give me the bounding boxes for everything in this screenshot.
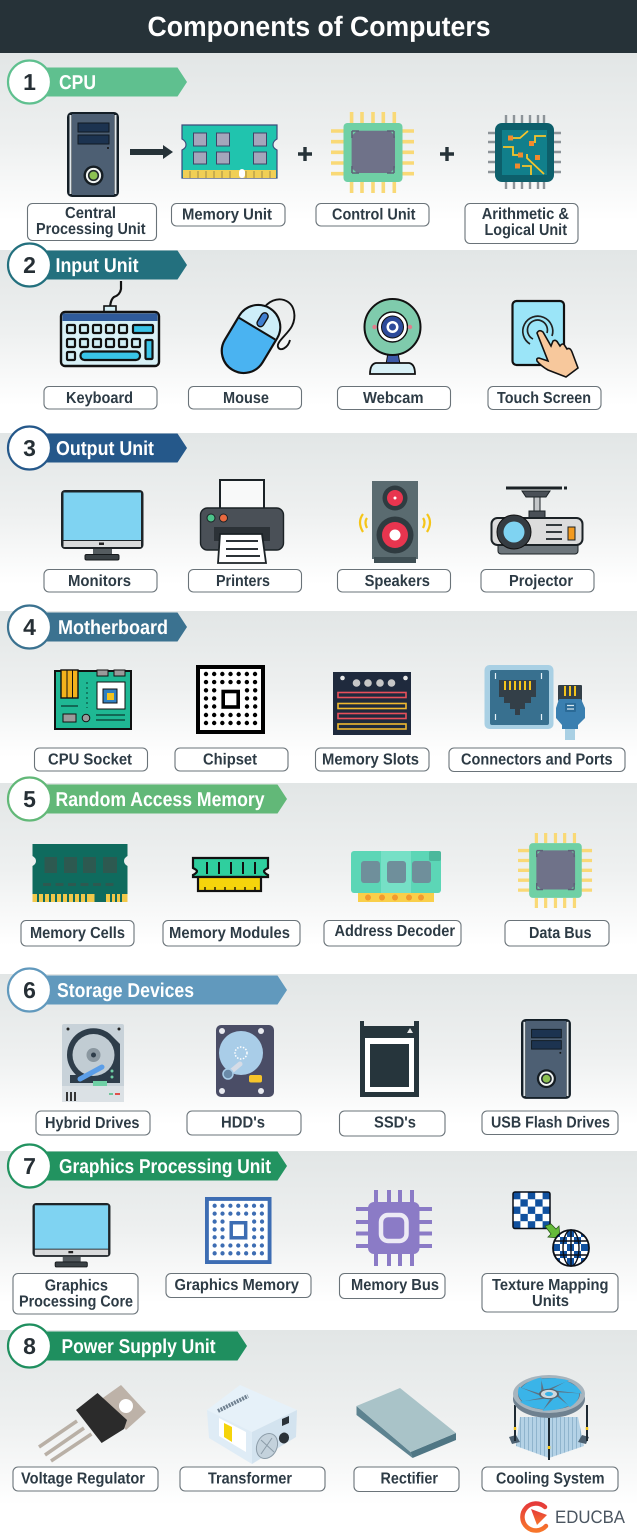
icon: arithmetic logic chip — [488, 115, 561, 189]
label: Texture Mapping Units: Texture Mapping — [492, 1277, 608, 1294]
panel background — [0, 611, 637, 783]
panel: Random Access Memory — [0, 778, 637, 974]
icon: address decoder — [351, 851, 441, 902]
label: Connectors and Ports — [449, 748, 625, 772]
section badge 1: CPU — [59, 72, 96, 94]
icon: data bus chip — [518, 833, 592, 908]
icon: transformer power supply — [207, 1385, 297, 1464]
label: Memory Modules: Memory Modules — [169, 925, 290, 942]
label: Graphics Processing Core — [13, 1274, 138, 1314]
label: Memory Cells — [21, 920, 134, 946]
label: Memory Cells: Memory Cells — [30, 925, 125, 942]
label: Keyboard — [44, 386, 157, 409]
section badge 2 — [8, 244, 187, 286]
label: Voltage Regulator — [13, 1467, 158, 1491]
icon: webcam — [364, 299, 420, 374]
icon: memory unit — [182, 125, 277, 178]
section badge 1: 1 — [23, 69, 36, 95]
label: Projector — [481, 570, 594, 592]
logo: EDUCBA — [522, 1504, 625, 1531]
label: Voltage Regulator: Voltage Regulator — [21, 1470, 145, 1488]
label: Touch Screen — [488, 386, 601, 410]
panel: Storage Devices — [0, 968, 637, 1151]
label: Memory Unit: Memory Unit — [182, 206, 273, 224]
label: Cooling System — [482, 1467, 618, 1491]
section badge 2: Input Unit — [56, 255, 139, 277]
panel: Power Supply Unit — [0, 1324, 637, 1536]
label: SSD's: SSD's — [374, 1114, 416, 1132]
panel background — [0, 53, 637, 250]
label: Chipset: Chipset — [203, 752, 258, 768]
panel background — [0, 250, 637, 433]
panel background — [0, 783, 637, 974]
section badge 6: Storage Devices — [57, 980, 194, 1002]
panel background — [0, 1330, 637, 1536]
label: Keyboard: Keyboard — [66, 390, 133, 407]
panel background — [0, 433, 637, 611]
label: Memory Bus — [340, 1274, 445, 1298]
label: Projector: Projector — [509, 573, 573, 590]
label: USB Flash Drives — [482, 1111, 618, 1134]
label: Speakers: Speakers — [365, 573, 430, 590]
label: Touch Screen: Touch Screen — [497, 390, 591, 407]
label: Webcam: Webcam — [363, 390, 424, 407]
panel background — [0, 974, 637, 1151]
label: Control Unit — [316, 204, 429, 226]
label: Graphics Memory — [166, 1274, 311, 1298]
section badge 4: 4 — [23, 614, 36, 640]
icon: computer tower — [67, 112, 119, 197]
label: Address Decoder — [324, 920, 461, 946]
icon: memory modules — [193, 858, 268, 891]
label: Memory Unit — [172, 204, 285, 226]
icon: keyboard — [61, 281, 159, 366]
section badge 8 — [8, 1324, 247, 1368]
label: Transformer — [180, 1467, 325, 1491]
icon: monitor — [61, 490, 144, 560]
plus sign — [298, 147, 312, 161]
label: CPU Socket — [34, 748, 148, 771]
icon: graphics memory — [207, 1199, 270, 1262]
icon: mouse — [214, 297, 294, 381]
label: Monitors — [44, 570, 157, 592]
panel: Input Unit — [0, 244, 637, 433]
section badge 3: 3 — [23, 435, 36, 461]
section badge 6 — [8, 968, 287, 1012]
icon: control unit chip — [331, 112, 414, 193]
section badge 3 — [8, 426, 187, 470]
icon: printer — [200, 480, 284, 563]
label: Control Unit: Control Unit — [332, 206, 416, 224]
label: Chipset — [175, 748, 288, 771]
label: Memory Modules — [163, 920, 300, 946]
label: Arithmetic and Logical Unit: Logical Unit — [484, 222, 568, 239]
label: Rectifier — [354, 1467, 459, 1492]
panel: Graphics Processing Unit — [0, 1144, 637, 1330]
section badge 5 — [8, 778, 287, 820]
panel: Output Unit — [0, 426, 637, 611]
icon: speaker — [360, 481, 430, 563]
panel: CPU — [0, 53, 637, 250]
label: CPU Socket: CPU Socket — [48, 752, 133, 768]
label: Graphics Processing Core: Graphics — [45, 1278, 108, 1294]
label: Webcam — [338, 386, 450, 410]
section badge 7: Graphics Processing Unit — [59, 1156, 271, 1178]
label: Speakers — [338, 570, 450, 592]
label: Connectors and Ports: Connectors and Ports — [461, 752, 613, 768]
label: Transformer: Transformer — [208, 1470, 292, 1488]
label: Graphics Processing Core: Processing Core — [19, 1294, 133, 1310]
label: Memory Slots — [316, 748, 429, 771]
section badge 4: Motherboard — [58, 617, 168, 639]
label: Data Bus: Data Bus — [529, 925, 592, 942]
label: Memory Bus: Memory Bus — [351, 1277, 439, 1294]
section badge 6: 6 — [23, 977, 36, 1003]
icon: memory cells — [32, 844, 128, 902]
label: Central Processing Unit: Central — [65, 205, 116, 222]
section badge 3: Output Unit — [56, 438, 154, 460]
section badge 4 — [8, 606, 187, 648]
panel background — [0, 1151, 637, 1330]
label: Arithmetic and Logical Unit: Arithmetic & — [482, 206, 569, 223]
label: USB Flash Drives: USB Flash Drives — [491, 1114, 610, 1132]
section badge 5: Random Access Memory — [56, 789, 265, 811]
icon: memory bus chip — [356, 1190, 432, 1266]
label: Arithmetic and Logical Unit — [465, 204, 578, 244]
label: Cooling System: Cooling System — [496, 1470, 604, 1488]
label: HDD's: HDD's — [221, 1114, 265, 1132]
icon: connectors and ports — [484, 665, 585, 740]
panel: Motherboard — [0, 606, 637, 783]
section badge 8: Power Supply Unit — [62, 1336, 216, 1358]
icon: USB flash drive tower — [521, 1019, 571, 1099]
label: Texture Mapping Units: Units — [532, 1293, 569, 1310]
section badge 2: 2 — [23, 252, 36, 278]
icon: touch screen — [512, 301, 578, 377]
label: Monitors: Monitors — [68, 573, 131, 590]
label: Texture Mapping Units — [482, 1274, 618, 1312]
label: Mouse — [188, 386, 302, 409]
label: SSD's — [340, 1111, 445, 1136]
label: Mouse: Mouse — [223, 390, 269, 407]
section badge 5: 5 — [23, 786, 36, 812]
label: Address Decoder: Address Decoder — [334, 923, 455, 940]
label: Memory Slots: Memory Slots — [322, 752, 419, 768]
label: Hybrid Drives — [36, 1111, 150, 1135]
label: Hybrid Drives: Hybrid Drives — [45, 1115, 140, 1132]
section badge 8: 8 — [23, 1333, 36, 1359]
label: Rectifier: Rectifier — [380, 1470, 438, 1488]
icon: hard disk drive — [216, 1025, 274, 1097]
title: Components of Computers — [148, 11, 490, 42]
label: Graphics Memory: Graphics Memory — [174, 1277, 299, 1294]
label: HDD's — [187, 1111, 301, 1135]
label: Data Bus — [505, 920, 609, 946]
icon: graphics processing core monitor — [32, 1203, 110, 1267]
icon: voltage regulator — [39, 1385, 146, 1461]
icon: solid state drive — [360, 1021, 419, 1097]
section badge 7 — [8, 1144, 287, 1188]
icon: memory slots — [333, 672, 411, 735]
icon: cooling system — [509, 1375, 589, 1460]
icon: rectifier — [356, 1388, 456, 1458]
section badge 7: 7 — [23, 1153, 36, 1179]
arrow — [130, 145, 173, 159]
icon: chipset — [198, 667, 263, 732]
section badge 1 — [8, 60, 187, 104]
label: Central Processing Unit — [28, 204, 156, 240]
icon: texture mapping — [513, 1192, 589, 1266]
label: Central Processing Unit: Processing Unit — [36, 221, 146, 238]
label: Printers — [188, 570, 302, 592]
icon: CPU socket motherboard — [55, 670, 131, 729]
header bar — [0, 0, 637, 53]
icon: projector — [492, 486, 582, 554]
logo: EDUCBA: EDUCBA — [555, 1507, 625, 1527]
icon: hybrid drive — [62, 1024, 124, 1102]
plus sign — [440, 147, 454, 161]
label: Printers: Printers — [216, 573, 270, 590]
